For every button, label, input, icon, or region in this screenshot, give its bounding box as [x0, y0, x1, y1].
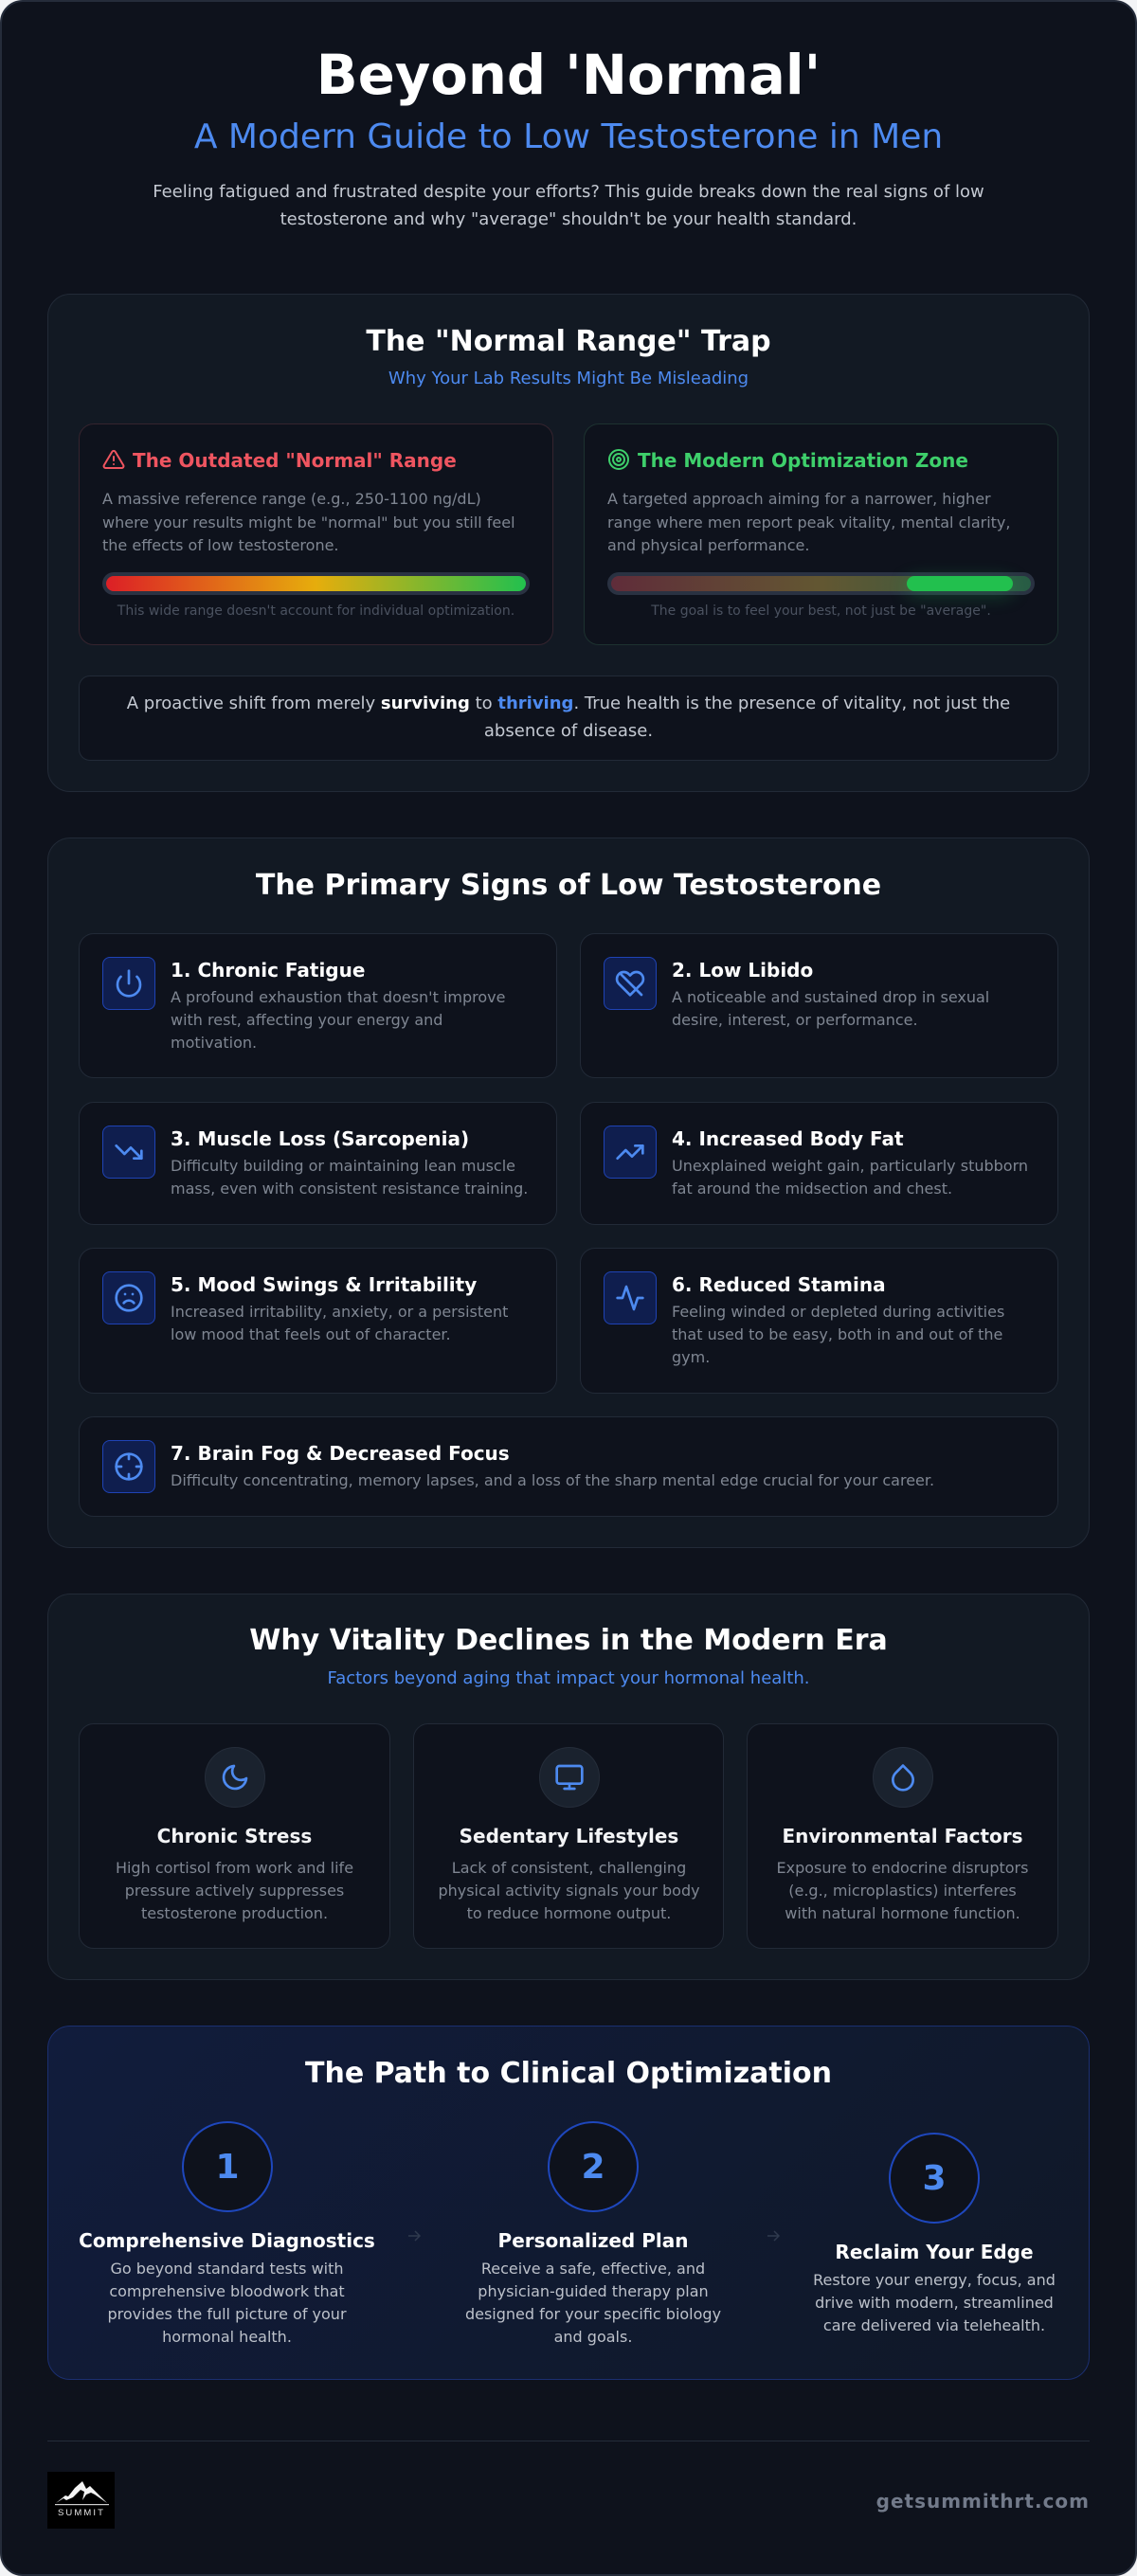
factor text: (e.g., microplastics) interferes: [788, 1882, 1017, 1900]
section subheading: Factors beyond aging that impact your hormonal health.: [328, 1668, 809, 1688]
subtitle: A Modern Guide to Low Testosterone in Men: [194, 117, 943, 156]
step text: comprehensive bloodwork that: [109, 2282, 345, 2300]
sign title: 2. Low Libido: [672, 959, 813, 982]
step text: hormonal health.: [162, 2328, 292, 2346]
sign title: 1. Chronic Fatigue: [171, 959, 365, 982]
callout: surviving to thriving: absence of disease.: [484, 721, 653, 741]
sign text: that used to be easy, both in and out of the: [672, 1325, 1002, 1343]
step text: Receive a safe, effective, and: [481, 2260, 705, 2278]
step text: drive with modern, streamlined: [815, 2294, 1054, 2312]
panel: primary signs: [47, 838, 1090, 1548]
sign 7: [79, 1416, 1058, 1517]
step number: [889, 2133, 980, 2224]
step number: [548, 2121, 639, 2212]
factor text: Lack of consistent, challenging: [452, 1859, 686, 1877]
sign text: [171, 1157, 528, 1198]
sign 4: [580, 1102, 1058, 1225]
section subheading: Why Your Lab Results Might Be Misleading: [388, 369, 749, 388]
sign text: A noticeable and sustained drop in sexual: [672, 988, 989, 1006]
factor title: Environmental Factors: [782, 1825, 1023, 1847]
sign text: Difficulty building or maintaining lean muscle: [171, 1157, 515, 1175]
sign text: Difficulty concentrating, memory lapses, and a loss of the sharp mental edge crucial for your career.: [171, 1471, 934, 1489]
callout: surviving to thriving: A proactive shift from merely surviving to thriving. True health is the presence of vitality, not just the: [127, 694, 1010, 713]
step text: Restore your energy, focus, and: [813, 2271, 1056, 2289]
step text: [465, 2260, 721, 2346]
step 3: [813, 2133, 1056, 2334]
icon: target: [608, 449, 629, 470]
step text: and goals.: [554, 2328, 632, 2346]
card text: A targeted approach aiming for a narrower, higher: [607, 490, 991, 508]
icon: heart crossed: [604, 957, 657, 1010]
icon: power: [102, 957, 155, 1010]
factor: environmental factors: [747, 1723, 1058, 1949]
step number: [182, 2121, 273, 2212]
card text: [102, 490, 515, 554]
factor text: with natural hormone function.: [785, 1904, 1020, 1922]
logo: summit: SUMMIT: [58, 2508, 105, 2518]
factor text: physical activity signals your body: [438, 1882, 700, 1900]
step text: provides the full picture of your: [107, 2305, 347, 2323]
sign text: low mood that feels out of character.: [171, 1325, 451, 1343]
factor title: Chronic Stress: [157, 1825, 312, 1847]
factor text: [116, 1859, 353, 1922]
sign text: [171, 988, 505, 1052]
bar caption: This wide range doesn't account for individual optimization.: [117, 603, 514, 619]
intro text: testosterone and why "average" shouldn't be your health standard.: [280, 209, 857, 229]
logo: summit: [47, 2472, 115, 2529]
icon: droplet: [872, 1747, 932, 1808]
card title: The Modern Optimization Zone: [638, 449, 968, 472]
card text: where your results might be "normal" but you still feel: [102, 513, 515, 531]
sign text: fat around the midsection and chest.: [672, 1180, 952, 1198]
step text: designed for your specific biology: [465, 2305, 721, 2323]
sign 1: [79, 933, 557, 1078]
sign 6: [580, 1248, 1058, 1394]
panel: normal range trap: [47, 294, 1090, 792]
step title: Reclaim Your Edge: [835, 2241, 1034, 2263]
step 1: [79, 2121, 375, 2346]
sign text: motivation.: [171, 1034, 257, 1052]
factor text: [438, 1859, 700, 1922]
card text: and physical performance.: [607, 536, 809, 554]
sign text: [171, 1303, 508, 1343]
step number: 1: [215, 2147, 240, 2187]
arrow 2: [767, 2230, 780, 2242]
card text: the effects of low testosterone.: [102, 536, 339, 554]
step number: 2: [581, 2147, 605, 2187]
sign title: 5. Mood Swings & Irritability: [171, 1273, 477, 1296]
step text: [813, 2271, 1056, 2334]
sign text: A profound exhaustion that doesn't improve: [171, 988, 505, 1006]
sign title: 6. Reduced Stamina: [672, 1273, 886, 1296]
icon: warning triangle: [102, 449, 125, 469]
step title: Personalized Plan: [498, 2229, 688, 2252]
sign title: 3. Muscle Loss (Sarcopenia): [171, 1127, 469, 1150]
sign text: gym.: [672, 1348, 710, 1366]
sign 2: [580, 933, 1058, 1078]
website url: getsummithrt.com: [876, 2490, 1090, 2513]
intro text: Feeling fatigued and frustrated despite your efforts? This guide breaks down the real signs of low: [153, 182, 984, 202]
card text: A massive reference range (e.g., 250-1100 ng/dL): [102, 490, 481, 508]
card text: range where men report peak vitality, mental clarity,: [607, 513, 1010, 531]
gradient range bar: [102, 572, 530, 595]
card: modern optimization zone: [584, 423, 1058, 645]
panel: path to clinical optimization: [47, 2026, 1090, 2380]
card: outdated normal range: [79, 423, 553, 645]
sign text: [672, 1303, 1004, 1366]
card title: The Outdated "Normal" Range: [133, 449, 457, 472]
callout: surviving to thriving: [79, 676, 1058, 761]
section heading: The "Normal Range" Trap: [366, 325, 771, 358]
sign 3: [79, 1102, 557, 1225]
factor text: High cortisol from work and life: [116, 1859, 353, 1877]
section heading: The Primary Signs of Low Testosterone: [256, 869, 881, 902]
sign text: Feeling winded or depleted during activities: [672, 1303, 1004, 1321]
factor text: [777, 1859, 1028, 1922]
sign text: Increased irritability, anxiety, or a persistent: [171, 1303, 508, 1321]
sign text: mass, even with consistent resistance training.: [171, 1180, 528, 1198]
icon: moon: [205, 1747, 265, 1808]
step text: care delivered via telehealth.: [823, 2316, 1045, 2334]
highlighted zone: [907, 576, 1013, 591]
icon: crosshair: [102, 1440, 155, 1493]
header: [153, 44, 984, 229]
factor text: testosterone production.: [141, 1904, 328, 1922]
step text: [107, 2260, 347, 2346]
step text: physician-guided therapy plan: [478, 2282, 709, 2300]
panel: why vitality declines: [47, 1594, 1090, 1980]
section heading: Why Vitality Declines in the Modern Era: [249, 1624, 888, 1657]
sign text: with rest, affecting your energy and: [171, 1011, 442, 1029]
factor title: Sedentary Lifestyles: [460, 1825, 678, 1847]
intro text: [153, 182, 984, 229]
section heading: The Path to Clinical Optimization: [305, 2057, 832, 2090]
optimal zone bar: [607, 572, 1035, 595]
sign 5: [79, 1248, 557, 1394]
card text: [607, 490, 1010, 554]
factor: sedentary lifestyles: [413, 1723, 724, 1949]
sign title: 7. Brain Fog & Decreased Focus: [171, 1442, 510, 1465]
footer: [47, 2441, 1090, 2529]
step title: Comprehensive Diagnostics: [79, 2229, 375, 2252]
icon: monitor: [538, 1747, 599, 1808]
factor: chronic stress: [79, 1723, 390, 1949]
sign text: Unexplained weight gain, particularly stubborn: [672, 1157, 1028, 1175]
icon: trending down: [102, 1126, 155, 1179]
step text: Go beyond standard tests with: [110, 2260, 344, 2278]
arrow 1: [408, 2230, 421, 2242]
bar caption: The goal is to feel your best, not just be "average".: [651, 603, 991, 619]
step 2: [465, 2121, 721, 2346]
sign text: desire, interest, or performance.: [672, 1011, 918, 1029]
icon: trending up: [604, 1126, 657, 1179]
sign text: [672, 988, 989, 1029]
factor text: to reduce hormone output.: [467, 1904, 671, 1922]
sign title: 4. Increased Body Fat: [672, 1127, 904, 1150]
sign text: [672, 1157, 1028, 1198]
step number: 3: [922, 2158, 947, 2198]
factor text: Exposure to endocrine disruptors: [777, 1859, 1028, 1877]
factor text: pressure actively suppresses: [125, 1882, 344, 1900]
icon: activity: [604, 1271, 657, 1324]
icon: frown: [102, 1271, 155, 1324]
title: Beyond 'Normal': [316, 44, 821, 107]
